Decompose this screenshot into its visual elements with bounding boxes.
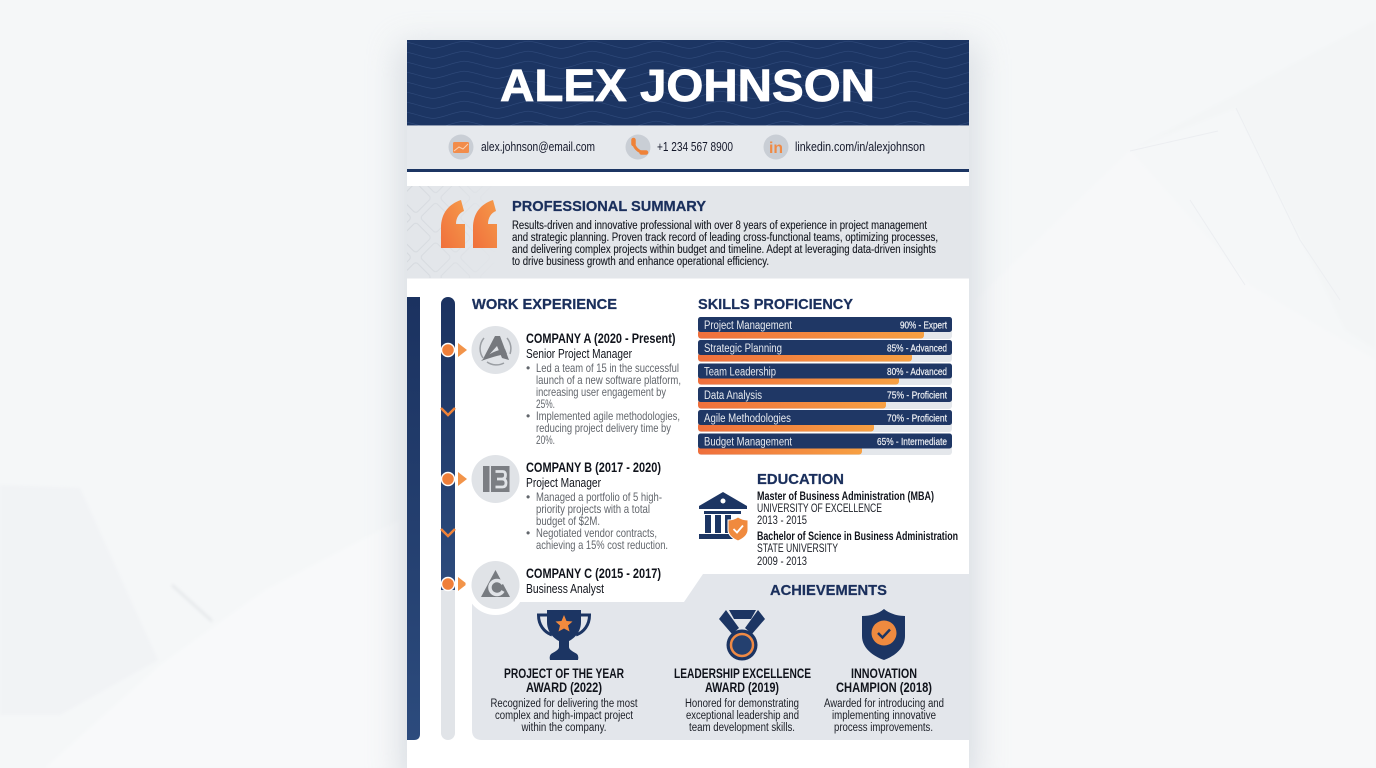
- job: company A: reducing project delivery time by: [536, 421, 671, 435]
- marker: company A: [442, 343, 467, 357]
- job: company B: priority projects with a total: [536, 502, 650, 516]
- achievement: leadership excellence: team development skills.: [689, 722, 795, 734]
- job: company B: •: [526, 490, 530, 504]
- timeline: [441, 297, 467, 740]
- summary text: to drive business growth and enhance operational efficiency.: [512, 254, 769, 268]
- job: company B: •: [526, 526, 530, 540]
- summary text: [512, 218, 938, 268]
- marker: company B: [442, 472, 467, 486]
- contact: email: [448, 134, 595, 160]
- degree: BS: [757, 529, 958, 568]
- work experience heading: WORK EXPERIENCE: [472, 296, 617, 313]
- icon: medal: [719, 610, 765, 660]
- job: company A: •: [526, 361, 530, 375]
- panel: work experience: [466, 296, 681, 615]
- job: company C: COMPANY C (2015 - 2017): [526, 566, 661, 581]
- achievement: project of the year: AWARD (2022): [526, 680, 602, 695]
- achievement: innovation champion: [824, 609, 944, 734]
- icon: institution with shield: [699, 492, 748, 541]
- job: company B: budget of $2M.: [536, 514, 600, 528]
- degree: MBA: 2013 - 2015: [757, 513, 807, 527]
- achievement: project of the year: within the company.: [521, 722, 606, 734]
- skills heading: SKILLS PROFICIENCY: [698, 296, 853, 313]
- skill: team leadership: Team Leadership: [704, 366, 776, 378]
- panel: education: [699, 471, 958, 568]
- degree: MBA: Master of Business Administration (MBA): [757, 489, 934, 503]
- summary text: Results-driven and innovative professional with over 8 years of experience in project management: [512, 218, 927, 232]
- name title: ALEX JOHNSON: [500, 60, 875, 111]
- contact: linkedin: in: [769, 140, 783, 157]
- contact: phone: [626, 134, 733, 160]
- job: company A: launch of a new software platform,: [536, 373, 681, 387]
- contact: phone: +1 234 567 8900: [657, 140, 733, 154]
- skill: agile methodologies: Agile Methodologies: [704, 413, 791, 425]
- skill: data analysis: [698, 387, 952, 409]
- panel: skills proficiency: [698, 296, 952, 455]
- skill: budget management: 65% - Intermediate: [877, 436, 947, 448]
- achievement: innovation champion: implementing innovative: [832, 710, 936, 722]
- achievement: project of the year: Recognized for delivering the most: [490, 698, 638, 710]
- logo: company B: [472, 455, 520, 503]
- job: company B: [472, 455, 668, 552]
- job: company A: [472, 326, 681, 447]
- job: company A: Senior Project Manager: [526, 347, 632, 361]
- summary heading: PROFESSIONAL SUMMARY: [512, 198, 706, 215]
- marker: company C: [442, 577, 467, 591]
- job: company C: [466, 555, 661, 615]
- resume page: [407, 40, 969, 768]
- achievement: leadership excellence: [674, 610, 811, 734]
- achievement: project of the year: PROJECT OF THE YEAR: [504, 666, 624, 681]
- skill: team leadership: [698, 364, 952, 385]
- achievement: leadership excellence: LEADERSHIP EXCELLENCE: [674, 666, 811, 681]
- panel: achievements: [472, 574, 969, 740]
- job: company C: Business Analyst: [526, 582, 604, 596]
- job: company A: increasing user engagement by: [536, 385, 666, 399]
- achievement: innovation champion: CHAMPION (2018): [836, 680, 932, 695]
- degree: BS: 2009 - 2013: [757, 554, 807, 568]
- achievement: leadership excellence: exceptional leadership and: [686, 710, 799, 722]
- skill: data analysis: 75% - Proficient: [887, 390, 947, 402]
- education heading: EDUCATION: [757, 471, 844, 488]
- degree: BS: STATE UNIVERSITY: [757, 541, 838, 555]
- achievement: innovation champion: Awarded for introducing and: [824, 698, 944, 710]
- achievement: innovation champion: INNOVATION: [851, 666, 917, 681]
- page shadow: [398, 44, 978, 768]
- skill: strategic planning: 85% - Advanced: [887, 342, 947, 354]
- skill: project management: Project Management: [704, 320, 793, 332]
- skill: agile methodologies: [698, 410, 952, 432]
- skill: strategic planning: [698, 340, 952, 362]
- achievement: project of the year: [490, 610, 638, 734]
- job: company A: Led a team of 15 in the successful: [536, 361, 679, 375]
- contact: linkedin: linkedin.com/in/alexjohnson: [795, 140, 925, 154]
- achievement: project of the year: complex and high-impact project: [495, 710, 634, 722]
- job: company A: 20%.: [536, 433, 555, 447]
- icon: quotation marks: [441, 200, 497, 248]
- degree: MBA: [757, 489, 934, 527]
- left accent bar: [407, 297, 420, 740]
- summary text: and strategic planning. Proven track record of leading cross-functional teams, optimizing processes,: [512, 230, 938, 244]
- achievement: leadership excellence: AWARD (2019): [705, 680, 779, 695]
- job: company B: Project Manager: [526, 476, 601, 490]
- chevron: [441, 529, 455, 536]
- contact: linkedin: [764, 134, 925, 160]
- skill: agile methodologies: 70% - Proficient: [887, 412, 947, 424]
- header banner: [407, 40, 969, 126]
- job: company B: COMPANY B (2017 - 2020): [526, 460, 661, 475]
- job: company B: achieving a 15% cost reduction.: [536, 538, 668, 552]
- icon: trophy: [538, 610, 590, 660]
- logo: company A: [472, 326, 520, 374]
- logo: company C: [466, 555, 526, 615]
- job: company A: COMPANY A (2020 - Present): [526, 331, 676, 346]
- job: company B: Negotiated vendor contracts,: [536, 526, 657, 540]
- skill: project management: 90% - Expert: [900, 320, 947, 332]
- summary text: and delivering complex projects within budget and timeline. Adept at leveraging data-driven insights: [512, 242, 936, 256]
- job: company B: Managed a portfolio of 5 high-: [536, 490, 662, 504]
- degree: MBA: UNIVERSITY OF EXCELLENCE: [757, 501, 882, 515]
- achievement: leadership excellence: Honored for demonstrating: [685, 698, 799, 710]
- icon: shield: [862, 609, 905, 660]
- chevron: [441, 408, 455, 415]
- achievements heading: ACHIEVEMENTS: [770, 582, 887, 599]
- job: company A: Implemented agile methodologies,: [536, 409, 680, 423]
- contact bar: [407, 126, 969, 172]
- skill: budget management: Budget Management: [704, 436, 793, 448]
- skill: budget management: [698, 434, 952, 455]
- panel: professional summary: [407, 186, 969, 278]
- degree: BS: Bachelor of Science in Business Administration: [757, 529, 958, 543]
- skill: project management: [698, 317, 952, 339]
- skill: team leadership: 80% - Advanced: [887, 366, 947, 378]
- contact: email: alex.johnson@email.com: [481, 140, 595, 154]
- job: company A: 25%.: [536, 397, 555, 411]
- skill: strategic planning: Strategic Planning: [704, 343, 782, 355]
- job: company A: •: [526, 409, 530, 423]
- skill: data analysis: Data Analysis: [704, 390, 762, 402]
- achievement: innovation champion: process improvements.: [834, 722, 933, 734]
